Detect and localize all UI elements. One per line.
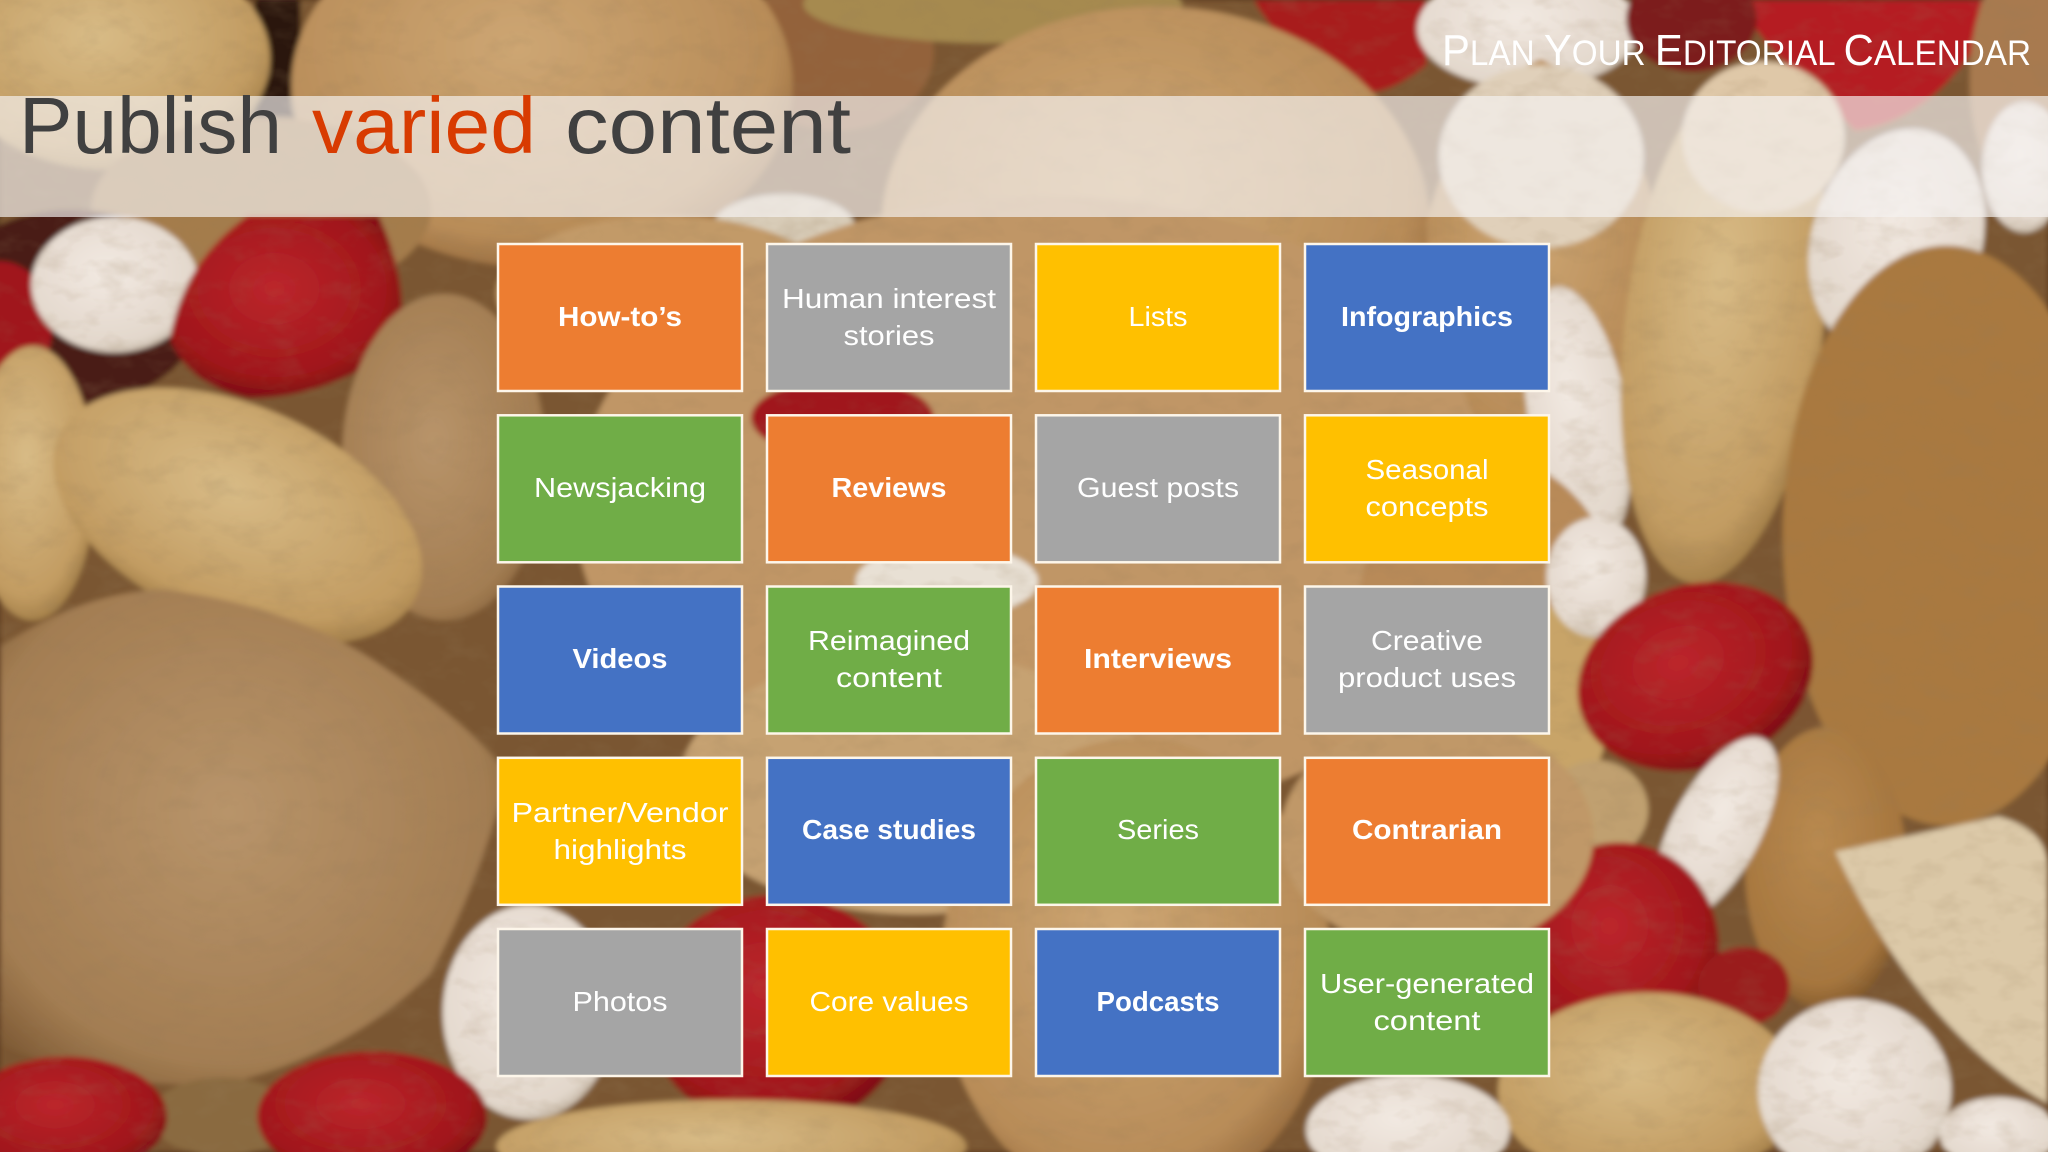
centre walnut	[882, 7, 1430, 451]
tile: reviews	[767, 415, 1011, 562]
translucent title band	[0, 96, 2048, 217]
left nuts	[0, 209, 202, 405]
tile: core values: Core values	[810, 986, 968, 1017]
title: publish varied content: Publish	[19, 81, 282, 170]
title: publish varied content: content	[565, 81, 851, 170]
top walnut	[291, 0, 793, 268]
bottom-right almond	[1835, 816, 2048, 1104]
tile: lists	[1036, 244, 1280, 391]
tile: human interest stories: stories	[844, 320, 934, 351]
content type grid	[498, 244, 1549, 1076]
almonds right of centre	[1426, 59, 1659, 470]
top-left peanut	[0, 0, 270, 170]
tile: newsjacking: Newsjacking	[534, 472, 706, 503]
tile: contrarian	[1305, 758, 1549, 905]
tile: infographics	[1305, 244, 1549, 391]
tile: creative product uses: product uses	[1338, 662, 1516, 693]
tile: reimagined content	[767, 586, 1011, 734]
tile: user-generated content: content	[1374, 1005, 1481, 1036]
red tops	[1254, 0, 1426, 93]
tile: interviews	[1036, 586, 1280, 734]
tile: guest posts	[1036, 415, 1280, 562]
bottom walnut	[940, 738, 1332, 1152]
tile: guest posts: Guest posts	[1077, 472, 1239, 503]
tile: reviews: Reviews	[832, 472, 946, 503]
tile: how-to's	[498, 244, 742, 391]
tile: videos	[498, 586, 742, 734]
tile: podcasts: Podcasts	[1096, 986, 1220, 1017]
tile: contrarian: Contrarian	[1352, 814, 1502, 845]
right red nuts	[1553, 552, 1838, 801]
tile: series: Series	[1117, 814, 1199, 845]
tile: partner/vendor highlights: highlights	[554, 834, 686, 865]
tall peanut	[1594, 58, 1854, 595]
tile: reimagined content: content	[836, 662, 942, 693]
tile: interviews: Interviews	[1084, 643, 1232, 674]
tile: seasonal concepts	[1305, 415, 1549, 562]
tile: user-generated content	[1305, 929, 1549, 1076]
title: publish varied content: varied	[312, 81, 536, 170]
tile: how-to's: How-to’s	[558, 301, 682, 332]
tile: core values	[767, 929, 1011, 1076]
title: publish varied content	[19, 81, 851, 170]
tile: videos: Videos	[572, 643, 668, 674]
tile: lists: Lists	[1128, 301, 1188, 332]
section label: plan your editorial calendar: PLAN YOUR EDITORIAL CALENDAR	[1442, 26, 2031, 75]
tile: case studies	[767, 758, 1011, 905]
tile: seasonal concepts: concepts	[1366, 491, 1488, 522]
tile: seasonal concepts: Seasonal	[1366, 454, 1488, 485]
tile: reimagined content: Reimagined	[808, 625, 970, 656]
tile: user-generated content: User-generated	[1320, 968, 1534, 999]
tile: newsjacking	[498, 415, 742, 562]
tile: human interest stories: Human interest	[782, 283, 996, 314]
giant walnut	[0, 590, 507, 1084]
tile: infographics: Infographics	[1341, 301, 1513, 332]
tile: creative product uses: Creative	[1371, 625, 1483, 656]
tile: photos: Photos	[572, 986, 668, 1017]
tile: partner/vendor highlights: Partner/Vendor	[512, 797, 728, 828]
tile: partner/vendor highlights	[498, 758, 742, 905]
tile: podcasts	[1036, 929, 1280, 1076]
tile: case studies: Case studies	[802, 814, 976, 845]
right walnut	[1698, 588, 1881, 823]
tile: photos	[498, 929, 742, 1076]
tile: creative product uses	[1305, 586, 1549, 734]
tile: series	[1036, 758, 1280, 905]
tile: human interest stories	[767, 244, 1011, 391]
